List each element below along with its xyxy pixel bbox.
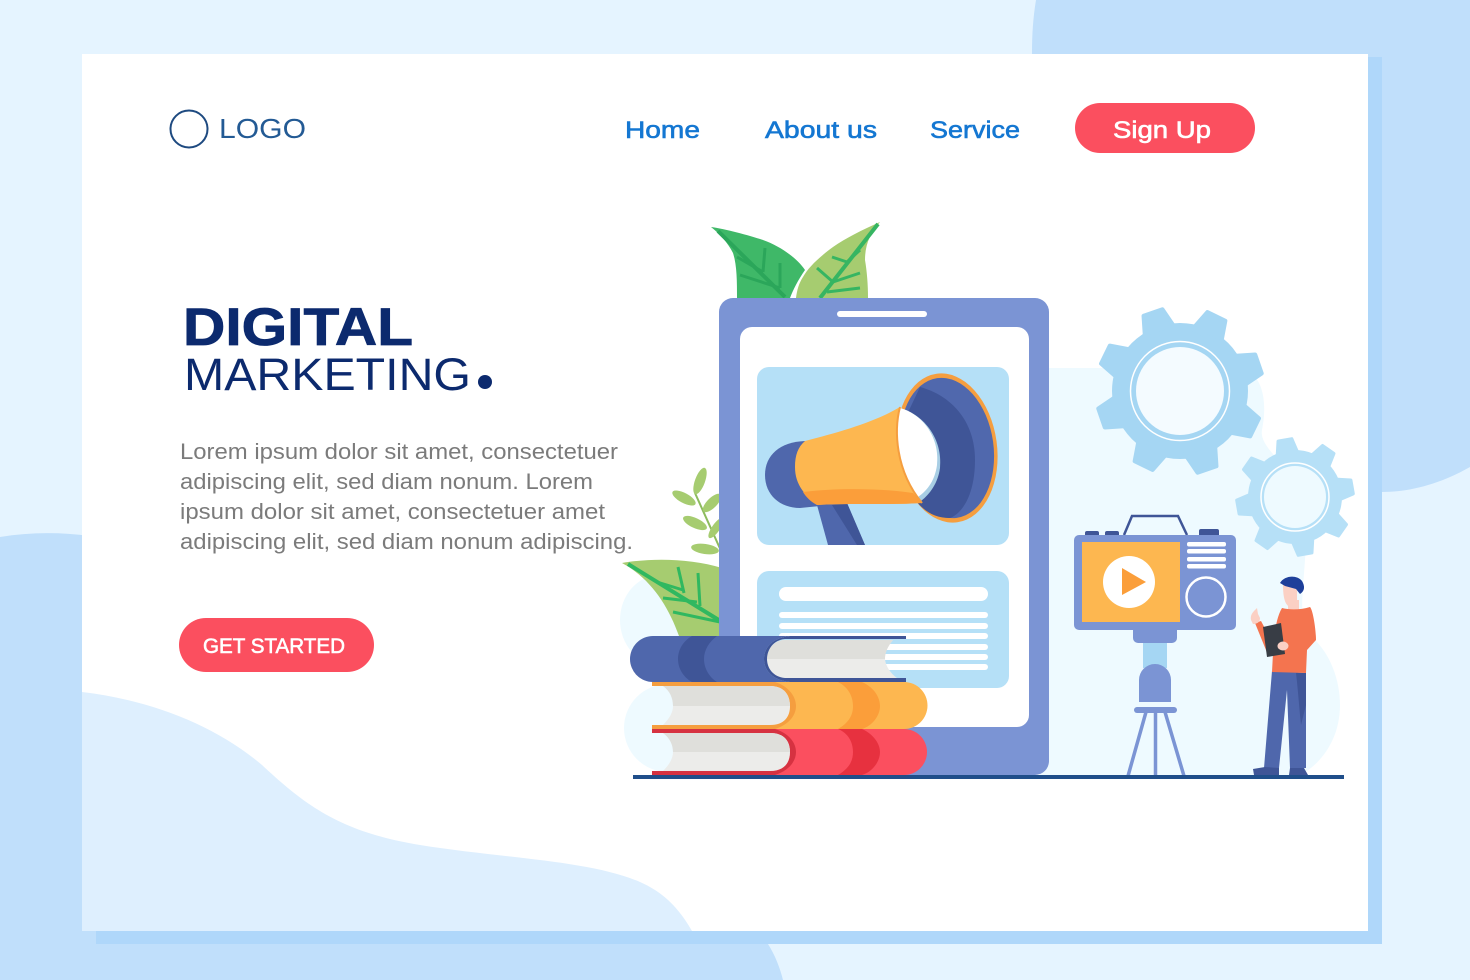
body paragraph: Lorem ipsum dolor sit amet, consectetuer bbox=[180, 439, 618, 464]
navigation: Service bbox=[930, 117, 1020, 144]
title bbox=[183, 298, 492, 400]
navigation bbox=[625, 117, 1020, 144]
text panel bbox=[757, 571, 1009, 688]
pale backdrop behind illustration bbox=[620, 368, 1340, 775]
megaphone bbox=[765, 367, 1007, 545]
landing page card bbox=[82, 54, 1368, 931]
camera strap bbox=[1124, 516, 1187, 535]
large gear bbox=[1096, 307, 1264, 475]
navigation: Home bbox=[625, 117, 700, 144]
ground line bbox=[633, 775, 1344, 779]
megaphone panel bbox=[757, 367, 1009, 545]
camera on tripod bbox=[1074, 516, 1236, 776]
tripod bbox=[1128, 712, 1184, 776]
title: MARKETING bbox=[184, 349, 471, 400]
top leaves bbox=[711, 222, 880, 298]
get started button: GET STARTED bbox=[203, 635, 345, 658]
red book bbox=[652, 729, 927, 775]
sign up button bbox=[1075, 103, 1255, 153]
title: DIGITAL bbox=[183, 298, 413, 357]
phone bbox=[719, 298, 1049, 775]
sprig leaves bbox=[670, 466, 726, 556]
logo bbox=[170, 110, 306, 148]
navigation: About us bbox=[765, 117, 877, 144]
person with clipboard bbox=[1251, 577, 1316, 775]
sign up button: Sign Up bbox=[1113, 117, 1211, 144]
play icon bbox=[1103, 556, 1155, 608]
yellow book bbox=[652, 682, 927, 729]
body paragraph bbox=[180, 439, 633, 554]
get started button bbox=[179, 618, 374, 672]
small gear bbox=[1236, 438, 1354, 556]
logo: LOGO bbox=[219, 113, 306, 144]
books stack bbox=[630, 636, 927, 775]
body paragraph: ipsum dolor sit amet, consectetuer amet bbox=[180, 499, 605, 524]
body paragraph: adipiscing elit, sed diam nonum. Lorem bbox=[180, 469, 593, 494]
body paragraph: adipiscing elit, sed diam nonum adipiscing. bbox=[180, 529, 633, 554]
lower leaf bbox=[622, 560, 722, 636]
blue book bbox=[630, 636, 906, 682]
